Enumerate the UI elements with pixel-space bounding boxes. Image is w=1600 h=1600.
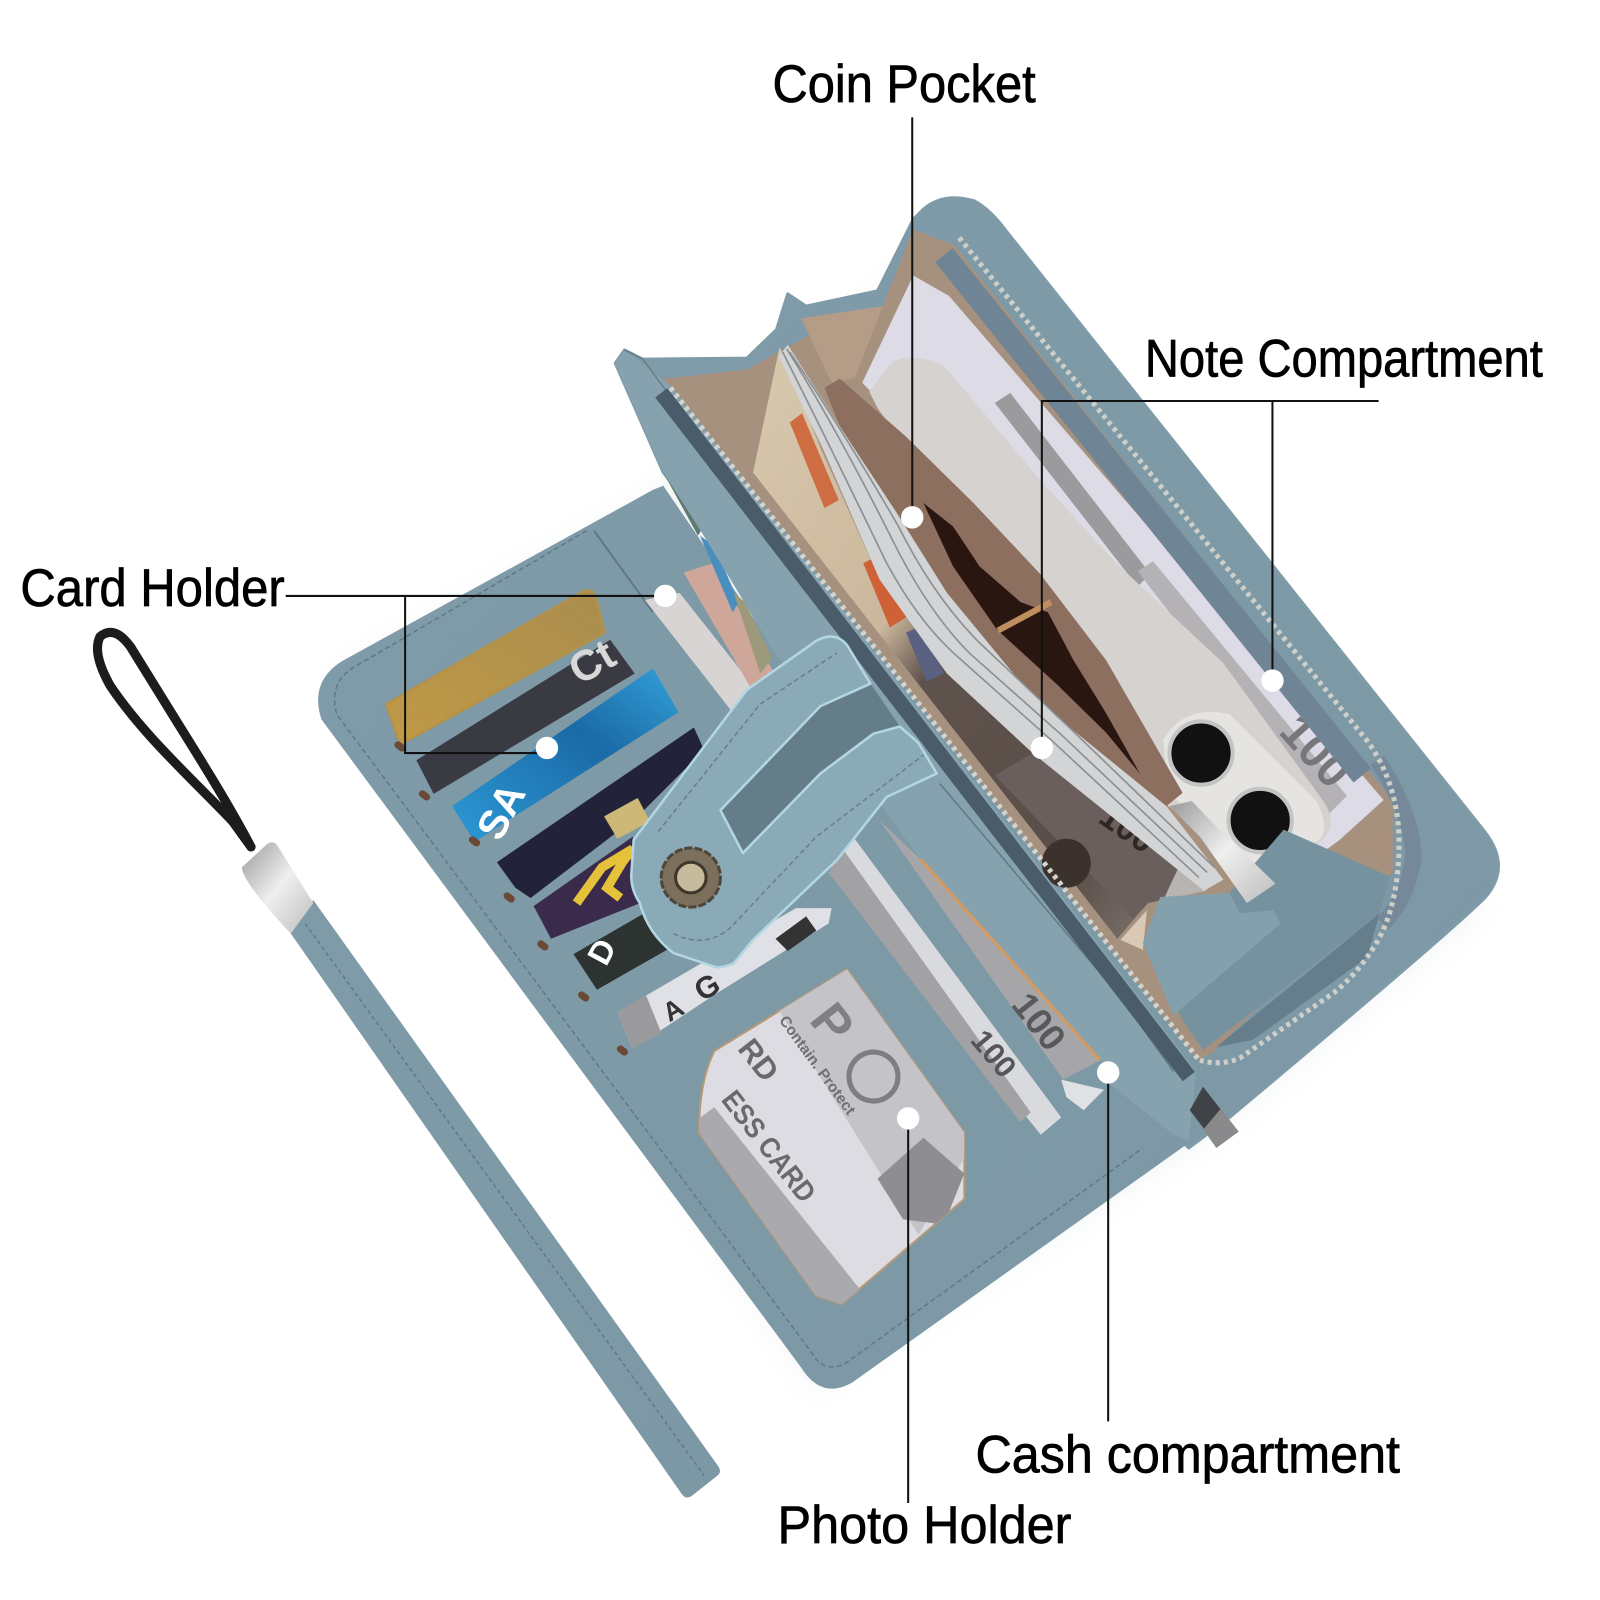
zipper right tape upper [944,255,1362,776]
camera lens two [1229,789,1292,852]
callout: cash compartment [976,1061,1400,1484]
coin pocket hollow [923,503,1140,773]
card: navy [497,728,704,898]
grey card text A: A [657,992,689,1028]
bill portrait seal [1042,839,1091,888]
card poking out tan [734,593,772,673]
zipper pull [1169,801,1276,903]
heading: Photo Holder [778,1496,1071,1555]
window background [699,969,964,1304]
printed note lower [1138,561,1347,816]
icon: wrist strap [97,632,720,1498]
bill orange block [863,555,906,628]
marker dot right [1261,669,1284,692]
panel: interior lining [657,230,1393,1061]
coin flap pocket [1143,830,1390,1050]
slot orange edge [920,859,1100,1060]
callout: note compartment [1031,330,1543,759]
marker dot left [1031,737,1053,759]
note strip print [829,849,1031,1122]
seal [849,1052,898,1101]
spine fold [624,350,694,429]
strap band [289,900,720,1498]
cream lining [1120,910,1147,950]
note strip digits: 100 [964,1023,1023,1084]
panel: flat front leather [318,486,1189,1389]
callout: photo holder [778,1107,1071,1555]
marker dot [1097,1061,1119,1084]
notes strip: bills [880,820,1100,1080]
zipper end dark [1190,1087,1220,1129]
zipper right teeth [959,238,1399,1063]
strap cord loop [97,632,251,847]
lower zipper tape [1216,913,1380,1047]
bill lower area [995,753,1204,918]
marker dot [897,1107,919,1130]
back note stack [862,276,1384,857]
phone [869,357,1331,878]
photo ID window [698,968,966,1306]
buckle strap [631,637,937,967]
panel: rear pouch leather [615,198,1498,1148]
QR code [878,1138,964,1224]
card poking out blue [700,536,739,612]
bill corner [1163,865,1206,900]
lining gusset [801,306,883,383]
heading: Note Compartment [1145,330,1543,389]
panel: wallet shadow [342,214,1480,1388]
spine stitching [940,784,1173,1071]
leader line [911,117,913,517]
big letter: P [799,992,865,1054]
grey card end [617,995,661,1049]
wallet [318,198,1498,1389]
camera bump [1163,712,1324,867]
dark card text: Ct [561,630,624,694]
grey band [699,1107,860,1304]
phone body [869,357,1331,878]
lining corner [1347,810,1393,866]
leader line [907,1118,909,1503]
card text: RD [731,1032,785,1088]
panel: wallet spine [615,350,1196,1141]
button inner [676,862,706,893]
zipper corner tape [1378,760,1413,923]
cash stack edge [779,345,1223,891]
bill digits: 100 [1004,985,1074,1058]
purple card mark [577,849,633,903]
coin pocket zipper band [824,379,1183,806]
notes strip by card holder [645,593,776,735]
notes strip: white [829,837,1061,1135]
grey card dark mark [776,916,816,951]
bill orange stamps [790,413,839,508]
strap stitching [658,653,923,940]
card slots [386,590,832,1049]
camera lens one [1169,721,1233,785]
zipper end pull [1190,1087,1239,1148]
bill blue patch [906,624,944,682]
leader line [1107,1072,1109,1421]
bill digits: 100 [1092,797,1162,861]
printed note band [995,393,1150,587]
zipper left tape [661,393,1189,1077]
inner pocket seam [594,531,653,612]
green card text: D [580,932,623,971]
card: gold [386,590,605,745]
heading: Card Holder [20,559,285,618]
window under strap [720,684,900,853]
flat panel stitching [335,531,1143,1367]
card text second line: ESS CARD [715,1085,822,1209]
notes strip two [684,563,786,704]
cash stack lines [783,349,1214,878]
leader lines [1042,401,1379,748]
note printed digits: 100 [1270,705,1361,798]
leader lines [286,596,665,753]
metal clasp [242,842,313,934]
grey card text G: G [689,967,726,1008]
card: green-black [573,908,668,990]
card chip [604,798,650,839]
marker dot [901,506,923,529]
marker dot top [654,585,677,607]
blue card text: SA [467,775,535,847]
front bill [753,347,1204,939]
heading: Coin Pocket [772,55,1036,114]
callout: card holder [20,559,677,759]
card: purple [534,837,653,939]
coin flap fold [1143,893,1281,1015]
card poking out green [663,472,704,536]
heading: Cash compartment [976,1425,1400,1484]
card: blue [452,668,679,842]
callout: coin pocket [772,55,1036,529]
icon: flower snap button [661,848,720,907]
strap shape [631,637,937,967]
card: grey and white [617,908,832,1049]
card slot ends [398,745,624,1052]
contain text: Contain. Protect [775,1013,859,1118]
coin in pocket [998,602,1051,631]
grey top band [779,970,964,1234]
marker dot bottom [536,737,558,759]
zipper left teeth [670,388,1200,1061]
white note tip [1061,1080,1104,1110]
card: dark [416,640,635,794]
